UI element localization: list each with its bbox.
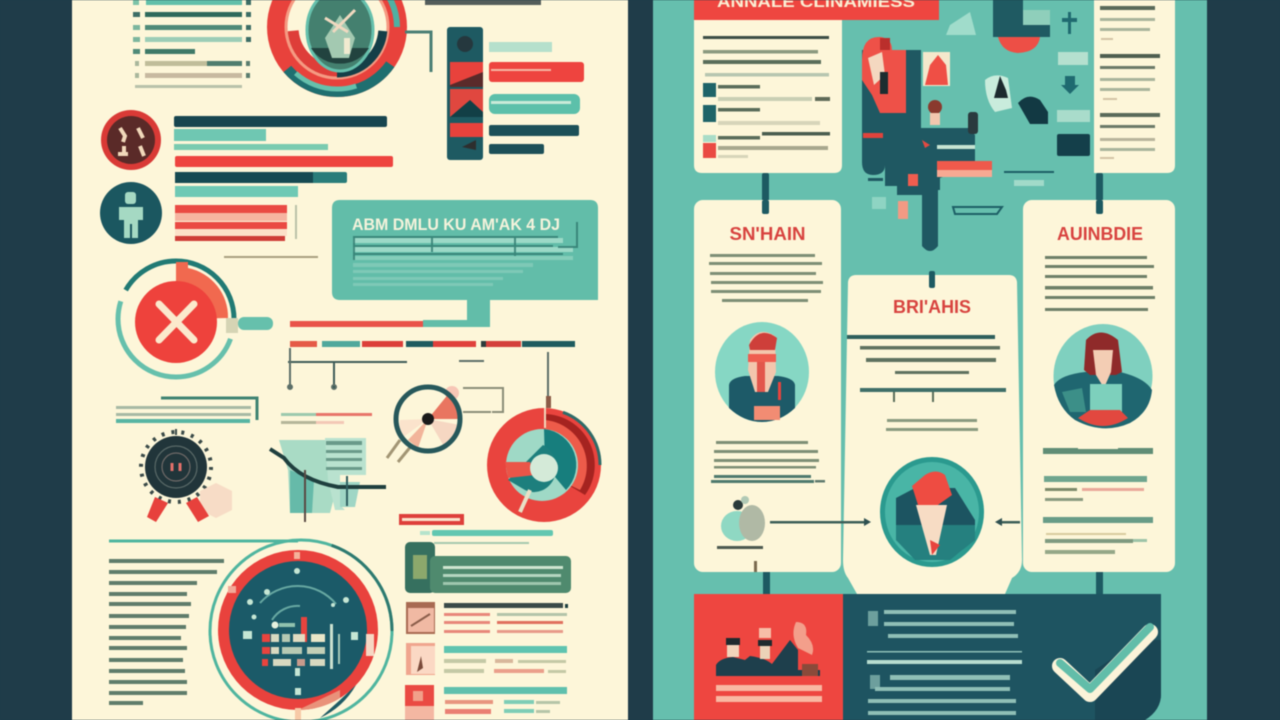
connector: right [1096, 173, 1103, 214]
icon: medal badge [141, 429, 232, 522]
connector: left [762, 173, 769, 214]
connector bar from callout [290, 321, 423, 327]
table: top rows [133, 0, 251, 88]
heading bar: teal [420, 530, 553, 544]
chart: top donut with bag icon [272, 0, 402, 92]
header: red banner [694, 0, 939, 20]
bar chart: horizontal bars [174, 116, 393, 258]
icon: person circle [100, 182, 162, 244]
icon: magnifier with wedges [387, 386, 460, 462]
arc line to big circle [109, 540, 298, 542]
callout: teal text box [332, 200, 598, 327]
callout heading: ABM DMLU KU AM'AK 4 DJ [352, 215, 560, 234]
arrow: right to center [995, 518, 1020, 526]
chart: teal pale block with curve [270, 413, 386, 522]
heading: middle card: BRI'AHIS [893, 297, 971, 317]
label: red tag [399, 514, 464, 525]
card: green note [405, 542, 571, 593]
panel: bottom dark text and check [843, 594, 1161, 720]
icon: small people cluster [721, 496, 765, 541]
connector: bottom right [1096, 572, 1103, 594]
portrait: woman [1054, 324, 1152, 428]
text block: lower left list [109, 559, 224, 705]
center illustration [862, 0, 1090, 251]
connector: bottom left [763, 572, 770, 594]
connector lines under segmented bar [288, 348, 548, 398]
list row 3 [405, 685, 567, 720]
connector: donut to sidebar [405, 32, 431, 72]
card: top right text [1094, 0, 1175, 173]
chart: red donut [487, 396, 601, 522]
card: right person [1023, 200, 1175, 572]
heading: right card: AUINBDIE [1057, 224, 1143, 244]
icon: people group [716, 622, 820, 676]
chart: big radial gauge [210, 540, 392, 720]
connector: magnifier to red donut [463, 388, 503, 412]
portrait: central figure [880, 457, 984, 567]
icon: check mark [1060, 627, 1150, 694]
arrow: left to center [770, 518, 871, 526]
card: top left text [694, 20, 842, 173]
panel: bottom red team [694, 594, 843, 720]
card: left person [694, 200, 841, 572]
list row 2 [406, 643, 567, 675]
icon: red circle emblem [101, 110, 161, 170]
heading: left card: SN'HAIN [730, 224, 806, 244]
segmented bar [290, 341, 575, 347]
icon: red X gauge [118, 261, 273, 377]
panel: right teal poster [653, 0, 1207, 720]
list row 1 [406, 602, 568, 634]
sidebar: image strip with bars [447, 27, 584, 160]
portrait: man in suit [715, 322, 809, 422]
card: middle person [843, 271, 1022, 594]
text block: upper left note [116, 398, 257, 423]
top right dark strip [425, 0, 541, 5]
panel: left cream poster [72, 0, 628, 720]
